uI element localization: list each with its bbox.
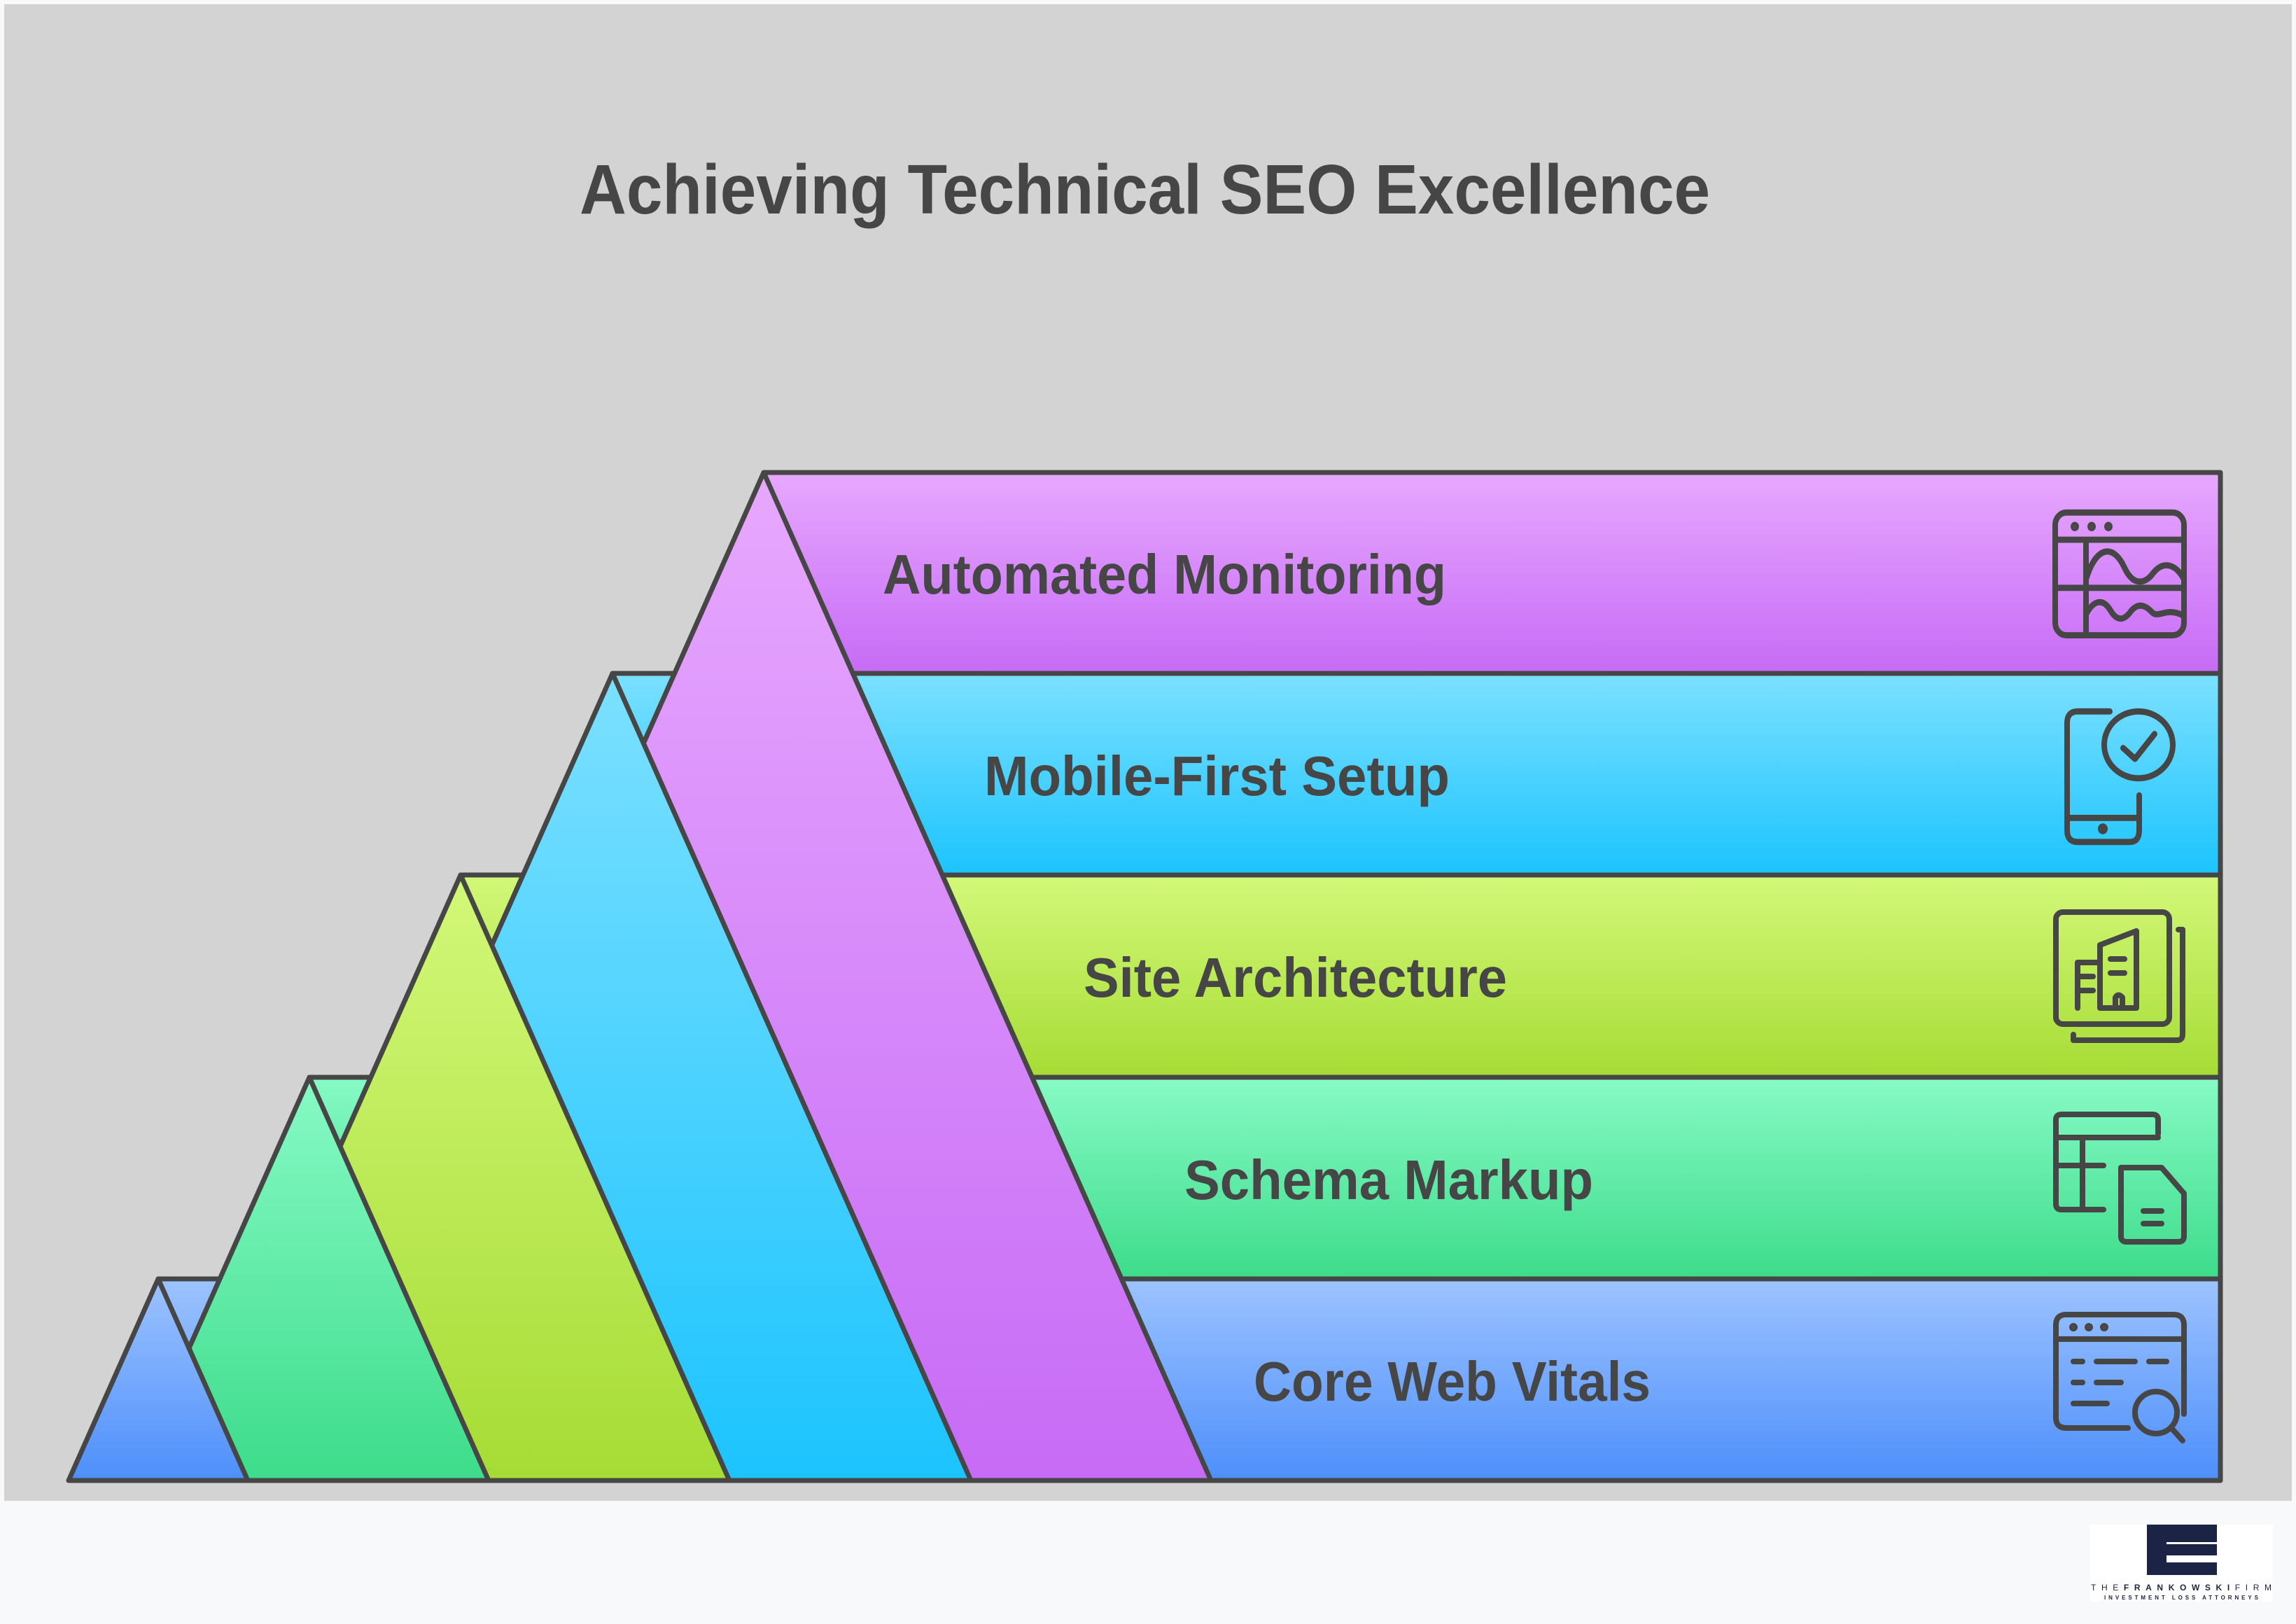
pyramid diagram xyxy=(69,472,2220,1480)
band: automated monitoring xyxy=(764,472,2220,673)
label: site architecture: Site Architecture xyxy=(1084,946,1507,1009)
icon: web vitals search xyxy=(2056,1315,2184,1441)
logo mark xyxy=(2147,1525,2217,1575)
title: Achieving Technical SEO Excellence xyxy=(580,150,1710,229)
triangle: mint xyxy=(130,1077,489,1480)
label: schema markup: Schema Markup xyxy=(1184,1149,1593,1211)
icon: monitoring dashboard xyxy=(2055,512,2184,636)
band: mobile-first setup xyxy=(612,673,2220,875)
logo: the frankowski firm: INVESTMENT LOSS ATTORNEYS xyxy=(2104,1595,2259,1601)
icon: schema markup xyxy=(2056,1114,2184,1242)
triangle: purple xyxy=(316,472,1211,1480)
triangle: blue xyxy=(254,673,971,1480)
triangle: lime xyxy=(192,875,729,1480)
logo text: THE FRANKOWSKI FIRM xyxy=(2091,1583,2272,1592)
band: schema markup xyxy=(309,1077,2220,1279)
label: core web vitals: Core Web Vitals xyxy=(1254,1350,1651,1413)
icon: mobile check xyxy=(2067,711,2173,842)
band: core web vitals xyxy=(158,1279,2220,1480)
band: site architecture xyxy=(461,875,2220,1077)
icon: site architecture xyxy=(2056,912,2183,1040)
label: mobile-first setup: Mobile-First Setup xyxy=(984,745,1450,807)
logo: the frankowski firm xyxy=(2090,1525,2273,1602)
label: automated monitoring: Automated Monitoring xyxy=(883,543,1446,606)
triangle: periwinkle xyxy=(69,1279,248,1480)
